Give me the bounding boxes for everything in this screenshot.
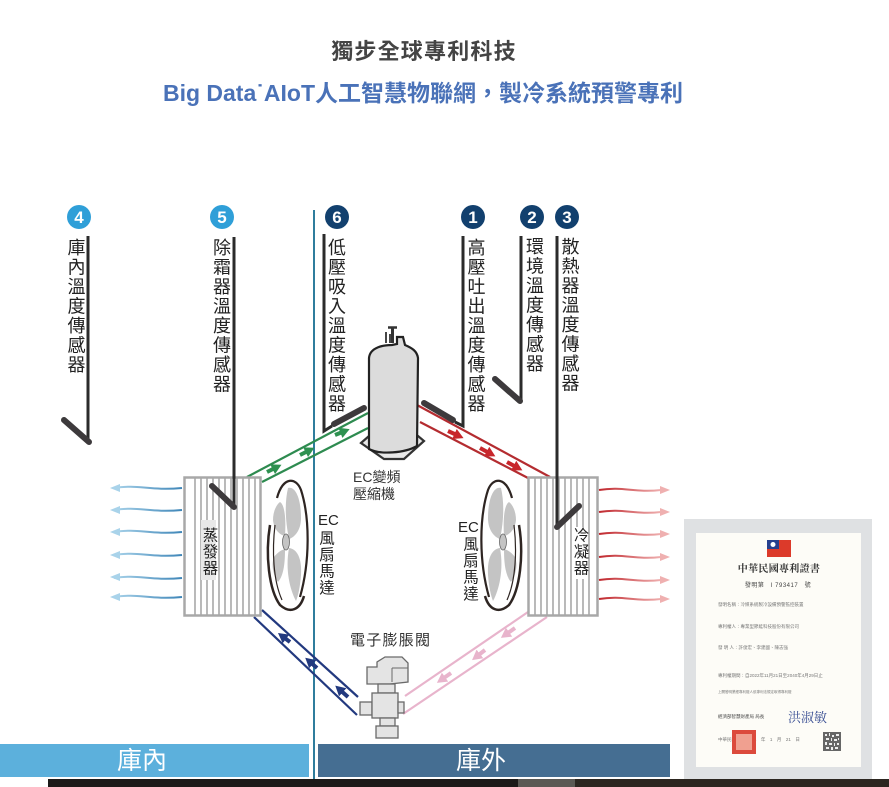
banner: outdoor: 庫外 xyxy=(456,747,506,775)
right fan label xyxy=(458,519,479,602)
sensor 3 number: 3 xyxy=(562,208,572,227)
left fan label: 風扇馬達 xyxy=(317,530,335,596)
sensor 2 number: 2 xyxy=(527,208,537,227)
left fan xyxy=(268,481,308,610)
sensor 1 number: 1 xyxy=(468,208,478,227)
compressor label: EC變頻 xyxy=(353,469,400,485)
certificate details: 專利權期間：自2022年11月21日至2040年4月29日止 xyxy=(718,672,823,679)
blue liquid pipe xyxy=(254,610,358,715)
banner: indoor xyxy=(0,744,309,777)
sensor 1 label: 高壓吐出溫度傳感器 xyxy=(466,238,486,414)
sensor 2 xyxy=(495,205,544,401)
certificate number: 發明第 I 793417 號 xyxy=(745,581,811,589)
right fan xyxy=(481,481,521,610)
electronic expansion valve xyxy=(360,657,408,738)
sensor 1 xyxy=(424,205,486,426)
red seal xyxy=(732,730,756,754)
evaporator coil xyxy=(184,478,260,616)
cold air arrows xyxy=(110,484,182,601)
sensor 6 number xyxy=(325,205,349,229)
sensor 5 label: 除霜器溫度傳感器 xyxy=(211,238,231,394)
certificate details xyxy=(718,601,823,743)
sensor 1 number xyxy=(461,205,485,229)
right fan label: 風扇馬達 xyxy=(461,536,479,602)
sensor 3 number xyxy=(555,205,579,229)
left fan label xyxy=(317,512,339,596)
sensor 4 number: 4 xyxy=(74,208,84,227)
certificate details: 發 明 人：許俊宏、李建國、陳志強 xyxy=(718,644,788,651)
sensor 5 number: 5 xyxy=(217,208,227,227)
signature: 洪淑敏 xyxy=(788,710,827,725)
red discharge pipe xyxy=(417,405,550,478)
sensor 2 number xyxy=(520,205,544,229)
bottom dark bar xyxy=(48,779,889,787)
left fan label: EC xyxy=(318,512,339,529)
certificate title: 中華民國專利證書 xyxy=(738,562,820,575)
banner: indoor: 庫內 xyxy=(117,747,167,775)
condenser label: 冷凝器 xyxy=(572,527,589,576)
sensor 4 number xyxy=(67,205,91,229)
title: 獨步全球專利科技 xyxy=(331,39,517,64)
valve label: 電子膨脹閥 xyxy=(350,632,430,649)
compressor xyxy=(361,328,424,459)
sensor 6 label: 低壓吸入溫度傳感器 xyxy=(326,238,346,414)
sensor 4 label: 庫內溫度傳感器 xyxy=(66,238,86,374)
sensor 5 xyxy=(210,205,234,507)
compressor label: 壓縮機 xyxy=(353,486,395,502)
sensor 6 number: 6 xyxy=(332,208,342,227)
QR code xyxy=(823,732,841,751)
hot air arrows xyxy=(599,486,670,603)
banner: outdoor xyxy=(318,744,670,777)
green suction pipe xyxy=(247,413,368,482)
right fan label: EC xyxy=(458,519,479,536)
sensor 3 xyxy=(555,205,580,527)
patent certificate xyxy=(684,519,872,779)
evaporator label: 蒸發器 xyxy=(200,527,218,576)
sensor 5 number xyxy=(210,205,234,229)
certificate details: 專利權人：專業型節能科技股份有限公司 xyxy=(718,623,799,630)
indoor outdoor divider xyxy=(313,210,315,779)
certificate details: 經濟部智慧財產局 局長 xyxy=(718,713,765,720)
certificate details: 發明名稱：冷媒系統製冷設備預警監控裝置 xyxy=(718,601,804,608)
sensor 2 label: 環境溫度傳感器 xyxy=(524,237,544,374)
sensor 4 xyxy=(64,205,91,442)
pink liquid pipe xyxy=(403,612,547,714)
certificate details: 中華民國 111 年 1 月 21 日 xyxy=(718,736,800,743)
sensor 3 label: 散熱器溫度傳感器 xyxy=(560,237,580,393)
flag xyxy=(767,540,791,557)
condenser coil xyxy=(528,478,598,616)
certificate details: 上開發明業經專利權人依專利法規定取得專利權 xyxy=(718,689,792,694)
subtitle: Big Data˙AIoT人工智慧物聯網，製冷系統預警專利 xyxy=(163,80,683,106)
sensor 6 xyxy=(324,205,364,431)
